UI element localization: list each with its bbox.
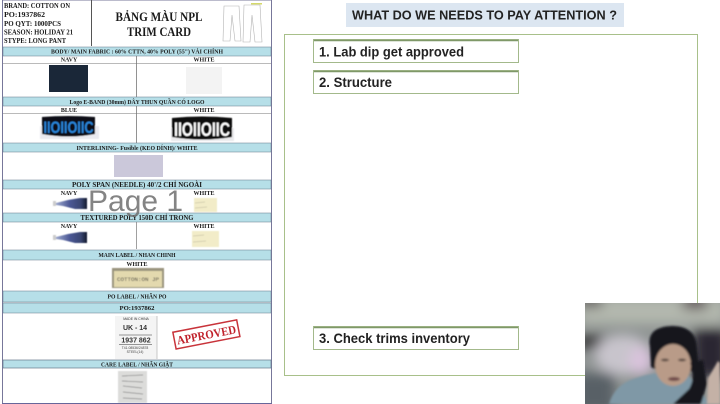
swatch: white fabric: [186, 67, 222, 94]
swatch: woven main label: [112, 268, 164, 288]
section: logo elastic band: [3, 97, 271, 143]
section: body fabric: BODY/ MAIN FABRIC : 60% CTTN, 40% POLY (55") VẢI CHÍNH: [51, 48, 223, 56]
size label image: [115, 316, 157, 359]
webcam: presenter video: [575, 298, 720, 404]
swatch: woven main label: COTTON:ON JP: [117, 277, 159, 283]
header block: [4, 0, 262, 46]
checklist item 3: 3. Check trims inventory: [319, 331, 470, 346]
size label image: MADE IN CHINA: [123, 317, 150, 321]
section: textured poly thread: NAVY: [61, 224, 78, 230]
size label image: STEEL(14): [127, 350, 143, 354]
card title: [116, 10, 202, 39]
section: poly span needle thread: NAVY: [61, 191, 78, 197]
heading banner: [346, 3, 624, 27]
section: body fabric: NAVY: [61, 58, 78, 64]
size label image: UK - 14: [123, 325, 147, 332]
section: PO label: [3, 291, 271, 359]
card title: TRIM CARD: [127, 25, 191, 39]
section: logo elastic band: WHITE: [193, 108, 215, 114]
panel: trim card sheet: [2, 0, 272, 404]
checklist item 2: [314, 70, 518, 94]
section: main label: MAIN LABEL / NHAN CHINH: [98, 253, 176, 259]
section: poly span needle thread: WHITE: [193, 191, 215, 197]
watermark: Page 1: Page 1: [88, 185, 183, 218]
swatch: interlining: [114, 155, 163, 177]
swatch: white thread: [192, 231, 219, 247]
swatch: white thread: [194, 198, 217, 212]
section: care label: [3, 360, 271, 403]
swatch: navy fabric: [49, 65, 88, 92]
swatch: navy thread: [53, 198, 87, 209]
section: PO label: PO LABEL / NHÃN PO: [108, 292, 167, 300]
section: poly span needle thread: [3, 180, 271, 212]
swatch: navy thread: [53, 232, 87, 243]
checklist item 1: [314, 40, 518, 62]
card title: BẢNG MÀU NPL: [116, 10, 202, 24]
section: PO label: PO:1937862: [120, 306, 154, 312]
checklist item 2: 2. Structure: [319, 75, 392, 90]
section: main label: [3, 250, 271, 288]
heading banner: WHAT DO WE NEEDS TO PAY ATTENTION ?: [352, 8, 617, 22]
presenter figure: [609, 326, 720, 404]
section: body fabric: WHITE: [193, 58, 215, 64]
stamp: approved: APPROVED: [176, 322, 238, 348]
section: poly span needle thread: POLY SPAN (NEEDLE) 40'/2 CHỈ NGOÀI: [72, 181, 202, 189]
order details text: BRAND: COTTON ON: [4, 3, 70, 10]
swatch: white logo band: [171, 116, 234, 141]
order details text: PO QYT: 1000PCS: [4, 21, 61, 28]
order details text: SEASON: HOLIDAY 21: [4, 30, 74, 36]
section: textured poly thread: [3, 213, 271, 249]
swatch: care label: [118, 371, 147, 403]
section: body fabric: [3, 47, 271, 97]
icon: pants sketch: [223, 3, 262, 42]
order details text: [4, 3, 74, 45]
section: logo elastic band: BLUE: [61, 108, 77, 114]
order details text: PO:1937862: [4, 12, 46, 19]
swatch: blue logo band: IIOIIOIIC: [44, 118, 94, 137]
checklist item 3: [314, 326, 518, 350]
order details text: STYPE: LONG PANT: [4, 38, 66, 45]
swatch: white logo band: IIOIIOIIC: [174, 120, 230, 141]
section: care label: CARE LABEL / NHÃN GIẶT: [101, 360, 173, 368]
section: textured poly thread: TEXTURED POLY 150D CHỈ TRONG: [80, 214, 194, 222]
checklist item 1: 1. Lab dip get approved: [319, 44, 464, 60]
swatch: blue logo band: [40, 116, 99, 139]
section: interlining: INTERLINING- Fusible (KEO DÍNH)/ WHITE: [76, 144, 198, 152]
size label image: T41.08536/24878: [122, 346, 148, 350]
section: textured poly thread: WHITE: [193, 224, 215, 230]
size label image: 1937 862: [121, 338, 151, 344]
section: logo elastic band: Logo E-BAND (30mm) DÂY THUN QUẦN CÓ LOGO: [70, 98, 205, 106]
section: main label: WHITE: [126, 262, 148, 268]
panel: attention checklist: [284, 34, 698, 376]
section: interlining: [3, 143, 271, 177]
